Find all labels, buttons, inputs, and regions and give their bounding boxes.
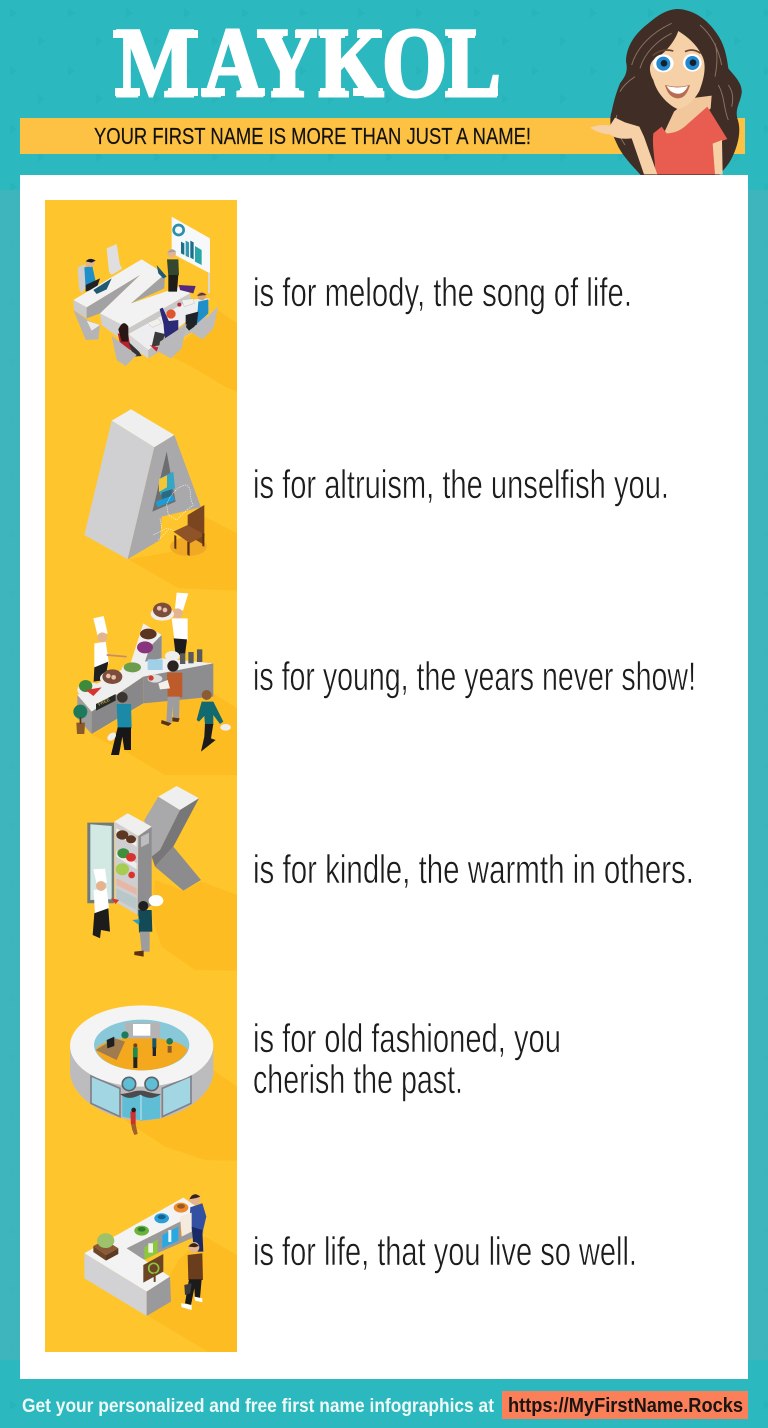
footer url badge: https://MyFirstName.Rocks bbox=[508, 1395, 743, 1417]
subtitle banner: YOUR FIRST NAME IS MORE THAN JUST A NAME! bbox=[94, 123, 531, 149]
illustration: letter M meeting table bbox=[73, 217, 237, 392]
footer call to action: Get your personalized and free first name infographics at bbox=[22, 1396, 495, 1417]
character: woman presenting bbox=[590, 9, 742, 175]
illustration: letter A with chair bbox=[84, 409, 237, 591]
text: O bbox=[253, 1017, 561, 1102]
yellow illustration column bbox=[45, 200, 237, 1352]
illustration: letter Y food counter bbox=[73, 593, 237, 775]
text: O: is for old fashioned, you bbox=[253, 1017, 561, 1061]
subtitle banner bbox=[20, 118, 745, 154]
illustration: letter K refrigerator bbox=[87, 786, 237, 971]
presentation board bbox=[172, 217, 210, 293]
white content panel bbox=[20, 175, 748, 1379]
illustration: letter O optician ring building bbox=[70, 1005, 237, 1161]
text: M: is for melody, the song of life. bbox=[253, 271, 632, 315]
illustration: letter Y food counter: FREE bbox=[97, 697, 111, 707]
text: O: cherish the past. bbox=[253, 1058, 463, 1102]
title: MAYKOL bbox=[116, 7, 501, 118]
text: L: is for life, that you live so well. bbox=[253, 1230, 637, 1274]
illustration: letter L recycling counter bbox=[84, 1194, 237, 1352]
